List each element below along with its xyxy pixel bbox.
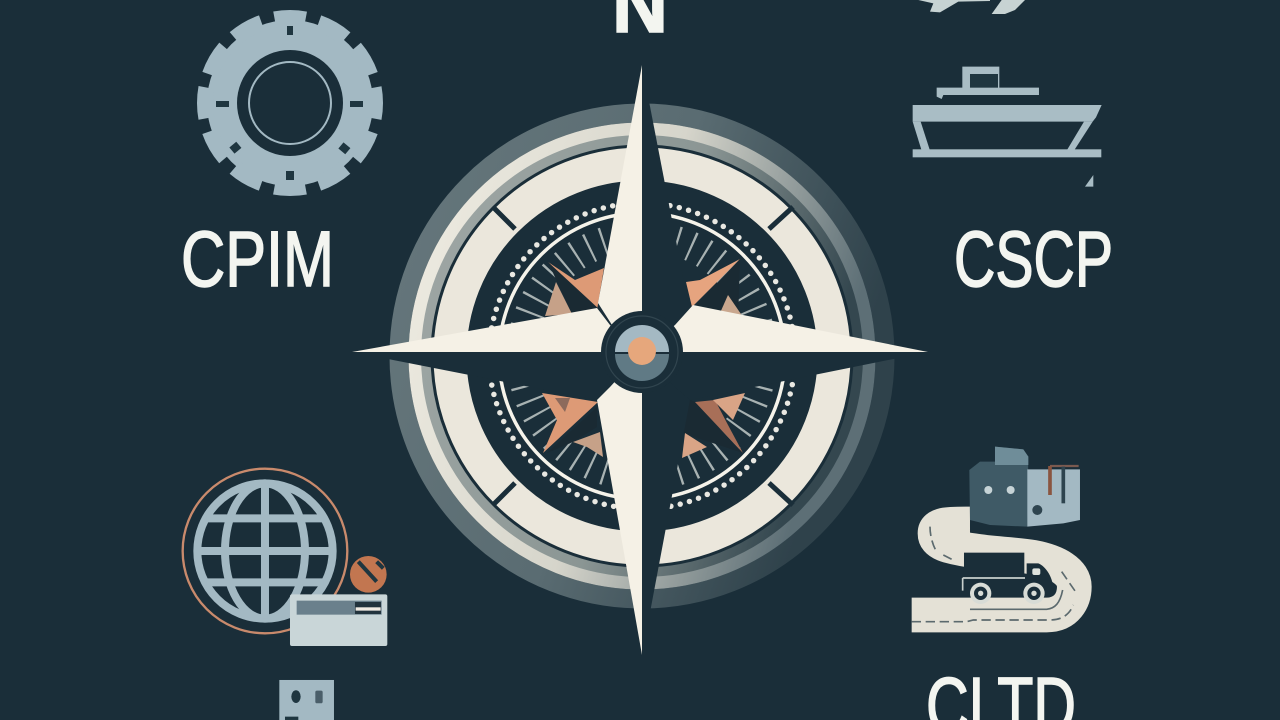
centre hub	[601, 311, 683, 393]
outer bezel rings	[399, 113, 885, 599]
building	[969, 447, 1080, 527]
compass star	[352, 65, 928, 655]
icon: warehouse and truck on road	[912, 447, 1080, 622]
card	[290, 594, 387, 646]
road	[912, 524, 1077, 622]
cream dial band	[450, 164, 834, 548]
label: CPIM: CPIM	[181, 214, 334, 303]
icon: airplane fragment	[918, 0, 1025, 14]
orange ball	[350, 556, 387, 593]
icon: globe with card	[183, 469, 387, 646]
compass	[352, 65, 928, 655]
truck	[963, 553, 1054, 604]
icon: ship	[913, 67, 1102, 187]
icon: socket	[279, 680, 334, 720]
dial dots and ticks	[489, 203, 795, 509]
label: CSCP: CSCP	[954, 214, 1113, 303]
globe	[197, 483, 333, 619]
orange orbit ring	[183, 469, 347, 633]
icon: gear	[205, 18, 375, 188]
orange diagonal star points	[542, 259, 745, 458]
